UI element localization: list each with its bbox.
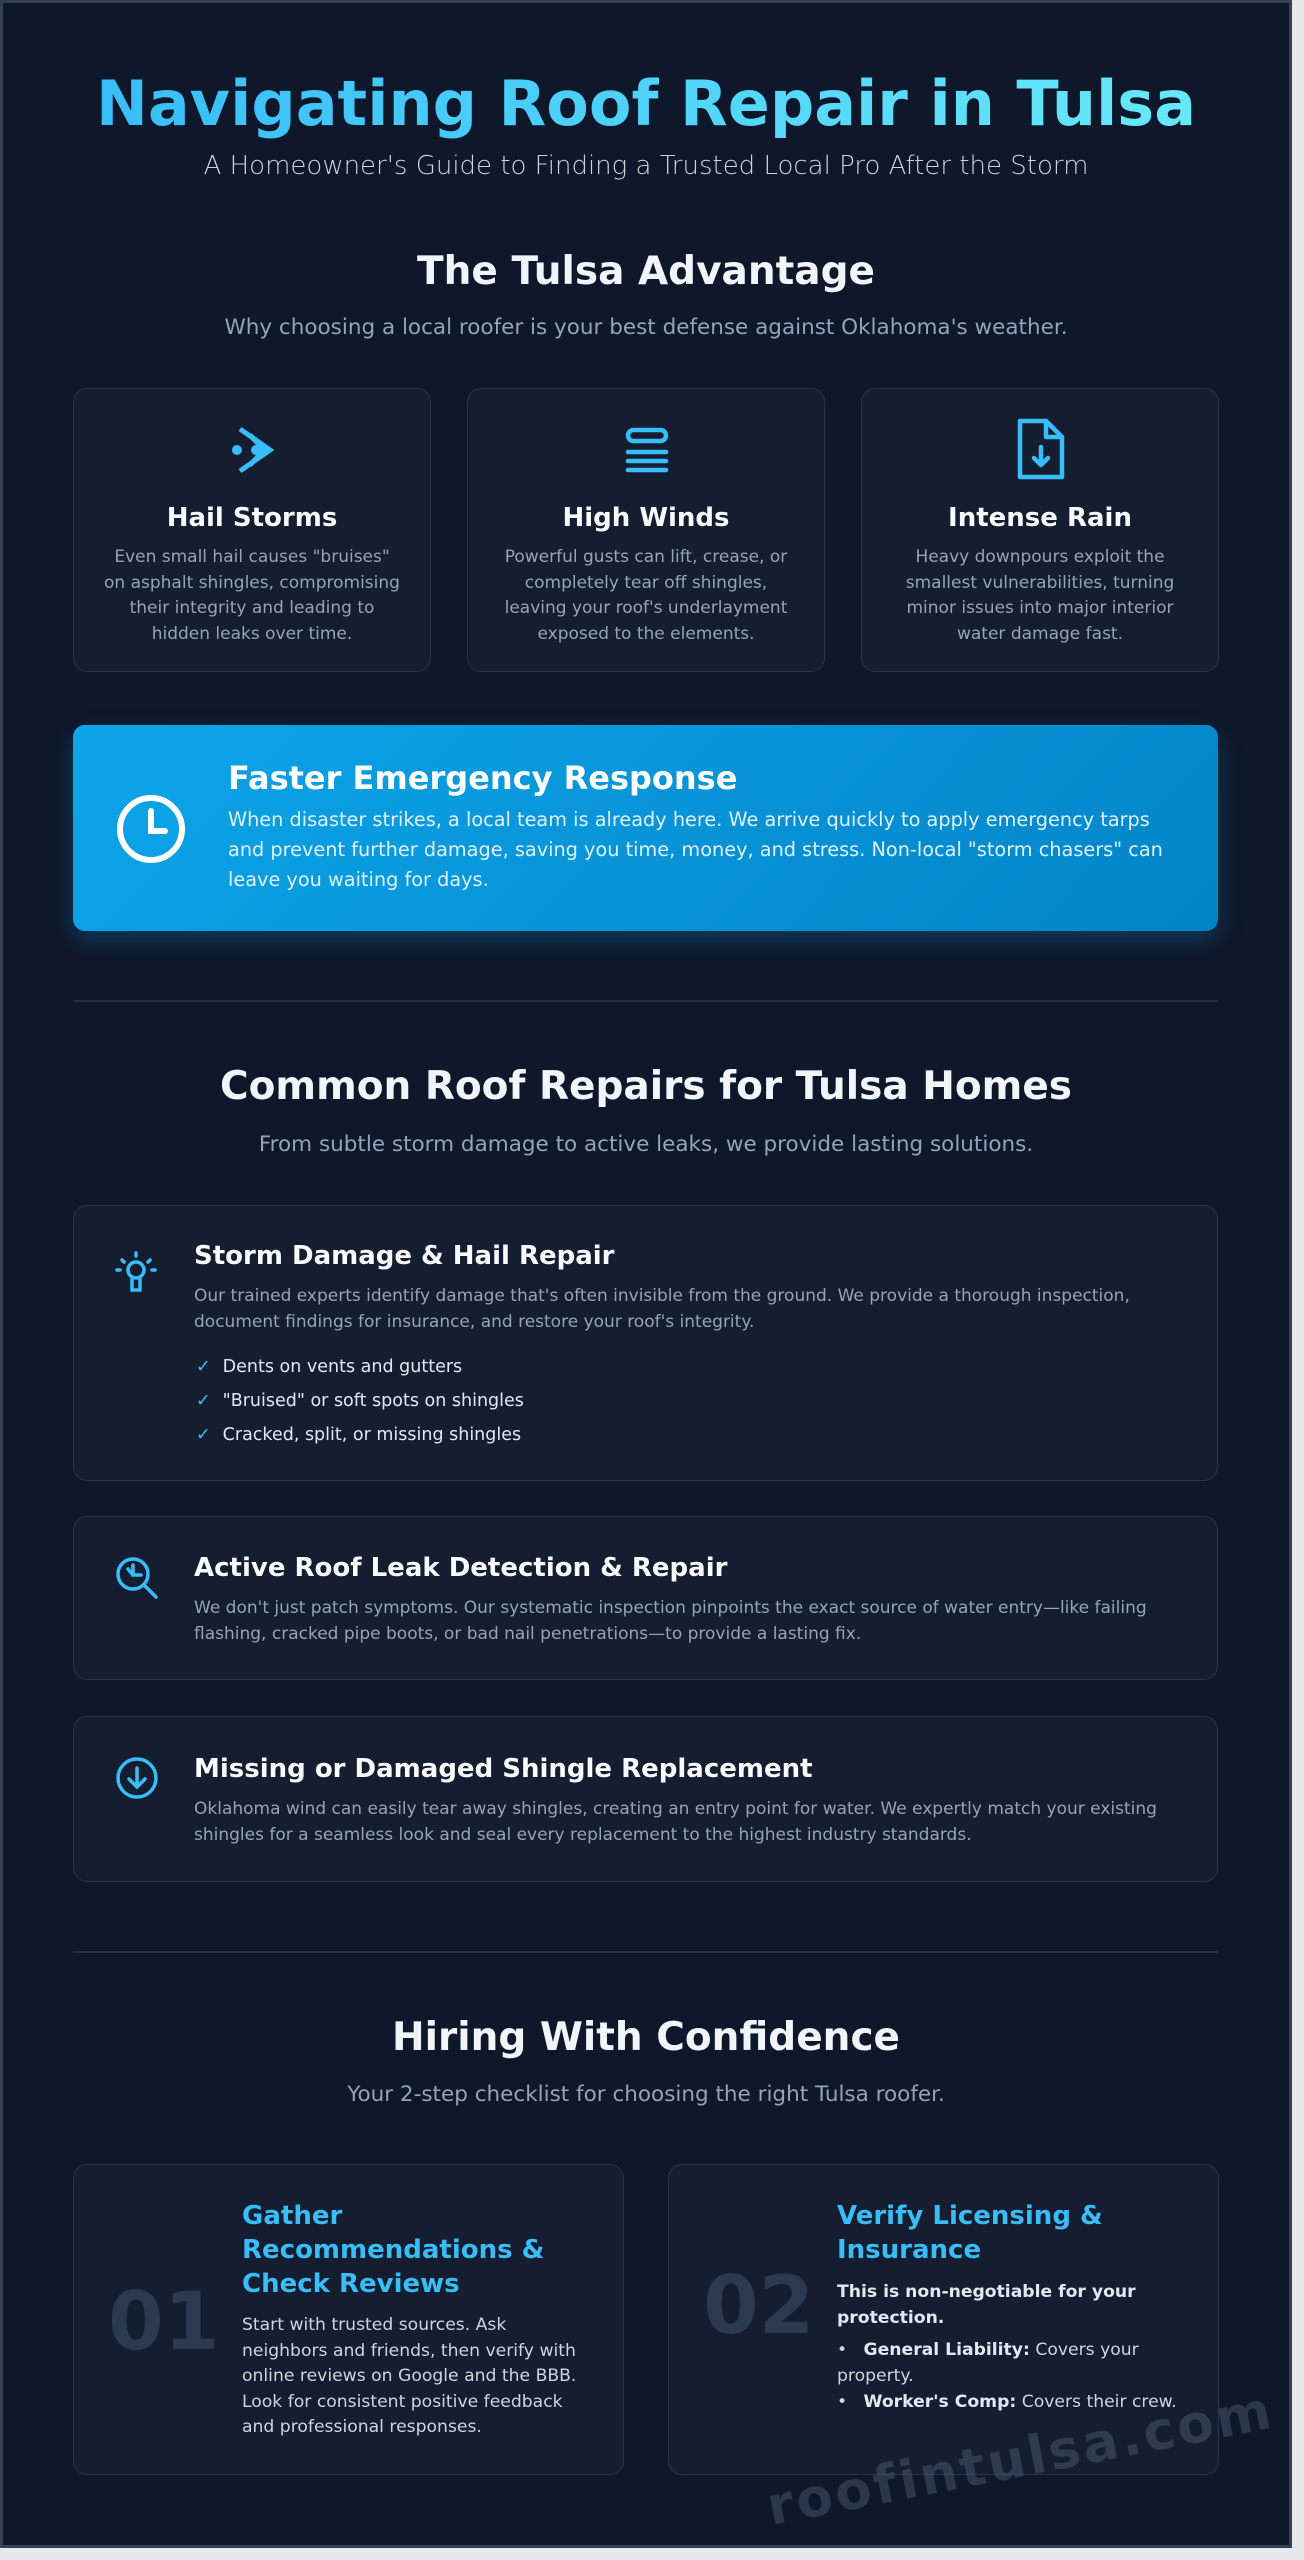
icon: arrow down circle [116,1757,158,1799]
card: high winds [467,388,825,672]
banner text: When disaster strikes, a local team is already here. We arrive quickly to apply emergency tarps and prevent further damage, saving you time, money, and stress. Non-local "storm chasers" can leave you waiting for days. [228,808,1163,891]
heading: The Tulsa Advantage: The Tulsa Advantage [417,249,875,294]
checklist: ✓ Dents on vents and gutters [196,1357,462,1377]
card: intense rain [861,388,1219,672]
icon: hail [232,427,274,473]
step text: This is non-negotiable for your protection. [837,2282,1136,2328]
icon: clock [117,795,185,863]
repair card: storm damage [73,1205,1218,1481]
card title: Hail Storms [167,503,337,533]
icon: lightbulb [115,1251,157,1292]
repair title: Missing or Damaged Shingle Replacement [194,1754,813,1784]
card title: High Winds [562,503,730,533]
card text: Even small hail causes "bruises" on asphalt shingles, compromising their integrity and leading to hidden leaks over time. [104,547,400,644]
repair card: leak detection [73,1516,1218,1680]
icon: wind [626,428,668,472]
checklist: ✓ "Bruised" or soft spots on shingles [196,1391,524,1411]
banner: faster emergency response [73,725,1218,931]
checklist: ✓ Cracked, split, or missing shingles [196,1425,521,1445]
repair title: Storm Damage & Hail Repair [194,1241,614,1271]
repair text: We don't just patch symptoms. Our systematic inspection pinpoints the exact source of water entry—like failing flashing, cracked pipe boots, or bad nail penetrations—to provide a lasting fix. [194,1598,1147,1644]
repair title: Active Roof Leak Detection & Repair [194,1553,727,1583]
step title: Verify Licensing & Insurance [837,2201,1103,2265]
step title: Gather Recommendations & Check Reviews [242,2201,544,2299]
icon: file download [1018,418,1064,480]
repair card: shingle replacement [73,1716,1218,1882]
title: Navigating Roof Repair in Tulsa [96,67,1196,140]
subheading: hiring: Your 2-step checklist for choosing the right Tulsa roofer. [347,2082,945,2107]
banner title: Faster Emergency Response [228,759,737,797]
step number: 01 [108,2275,219,2368]
card text: Powerful gusts can lift, crease, or completely tear off shingles, leaving your roof's underlayment exposed to the elements. [505,547,787,644]
step card 2 [668,2164,1219,2475]
step text [837,2282,1177,2412]
subheading: repairs: From subtle storm damage to active leaks, we provide lasting solutions. [259,1132,1033,1157]
card: hail storms [73,388,431,672]
card title: Intense Rain [948,503,1132,533]
checklist [196,1357,524,1445]
subtitle: A Homeowner's Guide to Finding a Trusted Local Pro After the Storm [204,151,1088,181]
subheading: advantage: Why choosing a local roofer is your best defense against Oklahoma's weather. [224,315,1068,340]
step text: • General Liability: Covers your property. [837,2340,1139,2386]
icon: search [116,1557,158,1599]
heading: common repairs: Common Roof Repairs for Tulsa Homes [220,1064,1072,1109]
card text: Heavy downpours exploit the smallest vulnerabilities, turning minor issues into major interior water damage fast. [906,547,1174,644]
step text: • Worker's Comp: Covers their crew. [837,2392,1177,2412]
step text: Start with trusted sources. Ask neighbors and friends, then verify with online reviews on Google and the BBB. Look for consistent positive feedback and professional responses. [242,2315,576,2437]
watermark: roofintulsa.com [762,2380,1279,2538]
repair text: Our trained experts identify damage that's often invisible from the ground. We provide a thorough inspection, document findings for insurance, and restore your roof's integrity. [194,1286,1130,1332]
step number: 02 [703,2259,814,2352]
repair text: Oklahoma wind can easily tear away shingles, creating an entry point for water. We expertly match your existing shingles for a seamless look and seal every replacement to the highest industry standards. [194,1799,1157,1845]
step card 1 [73,2164,624,2475]
heading: hiring: Hiring With Confidence [392,2015,900,2060]
